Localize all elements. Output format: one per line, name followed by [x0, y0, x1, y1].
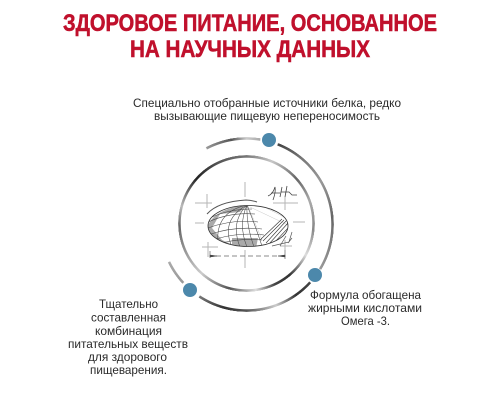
title: ЗДОРОВОЕ ПИТАНИЕ, ОСНОВАННОЕ	[63, 10, 437, 37]
text block: nutrient combination	[68, 297, 188, 377]
text block: omega-3: Формула обогащена	[310, 288, 421, 302]
text block: nutrient combination: для здорового	[88, 350, 167, 364]
ring: inner metallic ring	[178, 155, 314, 292]
text block: omega-3: жирными кислотами	[308, 301, 422, 315]
title: НА НАУЧНЫХ ДАННЫХ	[130, 36, 370, 63]
marker: right blue dot	[308, 268, 322, 282]
dimension line	[216, 255, 278, 257]
icon: kibble technical sketch	[195, 182, 305, 268]
text block: nutrient combination: комбинация	[95, 324, 162, 338]
signature	[268, 186, 297, 200]
text block: protein sources: Специально отобранные источники белка, редко	[133, 96, 401, 110]
marker: left blue dot	[183, 283, 197, 297]
text block: omega-3: Омега -3.	[341, 314, 390, 328]
text block: protein sources: вызывающие пищевую непереносимость	[154, 109, 380, 123]
crosshair guide lines	[195, 182, 305, 268]
kibble body	[208, 205, 291, 248]
text block: protein sources	[133, 96, 401, 123]
title	[63, 10, 437, 63]
text block: nutrient combination: питательных веществ	[68, 337, 188, 351]
ring: outer segmented metallic ring	[158, 136, 334, 312]
text block: nutrient combination: Тщательно	[99, 297, 158, 311]
marker: top blue dot	[262, 133, 276, 147]
text block: nutrient combination: пищеварения.	[90, 363, 167, 377]
text block: omega-3	[308, 288, 422, 328]
text block: nutrient combination: составленная	[91, 310, 166, 324]
